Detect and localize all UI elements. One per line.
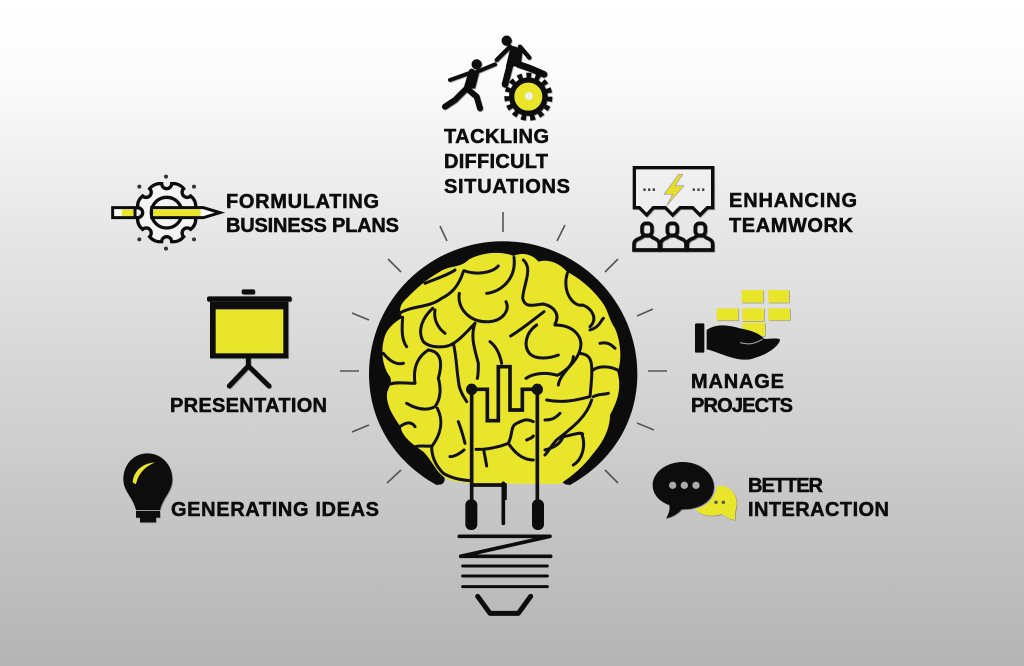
icon: better interaction speech bubbles — [653, 462, 737, 520]
label: enhancing teamwork — [729, 190, 857, 237]
icon: formulating business plans gear and pencil — [113, 175, 220, 251]
circuit filament — [472, 367, 537, 500]
label: tackling difficult situations: SITUATIONS — [444, 176, 570, 198]
bulb base — [459, 483, 551, 613]
icon: tackling difficult situations figures and gear — [445, 36, 549, 117]
label: better interaction: INTERACTION — [748, 499, 889, 521]
label: formulating business plans: BUSINESS PLANS — [226, 215, 399, 237]
label: enhancing teamwork: TEAMWORK — [729, 215, 854, 237]
label: manage projects: PROJECTS — [691, 395, 793, 417]
label: better interaction: BETTER — [748, 475, 824, 497]
label: better interaction — [748, 475, 889, 521]
icon: generating ideas light bulb — [123, 453, 172, 522]
label: manage projects: MANAGE — [691, 371, 784, 393]
brain — [382, 253, 620, 484]
rays around the bulb — [340, 212, 667, 483]
bulb outline ring — [369, 241, 637, 485]
label: tackling difficult situations: DIFFICULT — [444, 151, 548, 173]
icon: presentation screen — [207, 289, 292, 386]
label: presentation: PRESENTATION — [170, 395, 327, 417]
icon: enhancing teamwork speech screen and people — [634, 168, 713, 250]
label: formulating business plans: FORMULATING — [226, 191, 379, 213]
label: tackling difficult situations: TACKLING — [444, 126, 549, 148]
label: generating ideas: GENERATING IDEAS — [171, 499, 379, 521]
label: formulating business plans — [226, 191, 399, 237]
label: enhancing teamwork: ENHANCING — [729, 190, 857, 212]
central brain light bulb — [369, 241, 637, 613]
icon: manage projects hand and tiles — [695, 290, 790, 360]
label: manage projects — [691, 371, 793, 417]
label: tackling difficult situations — [444, 126, 570, 198]
